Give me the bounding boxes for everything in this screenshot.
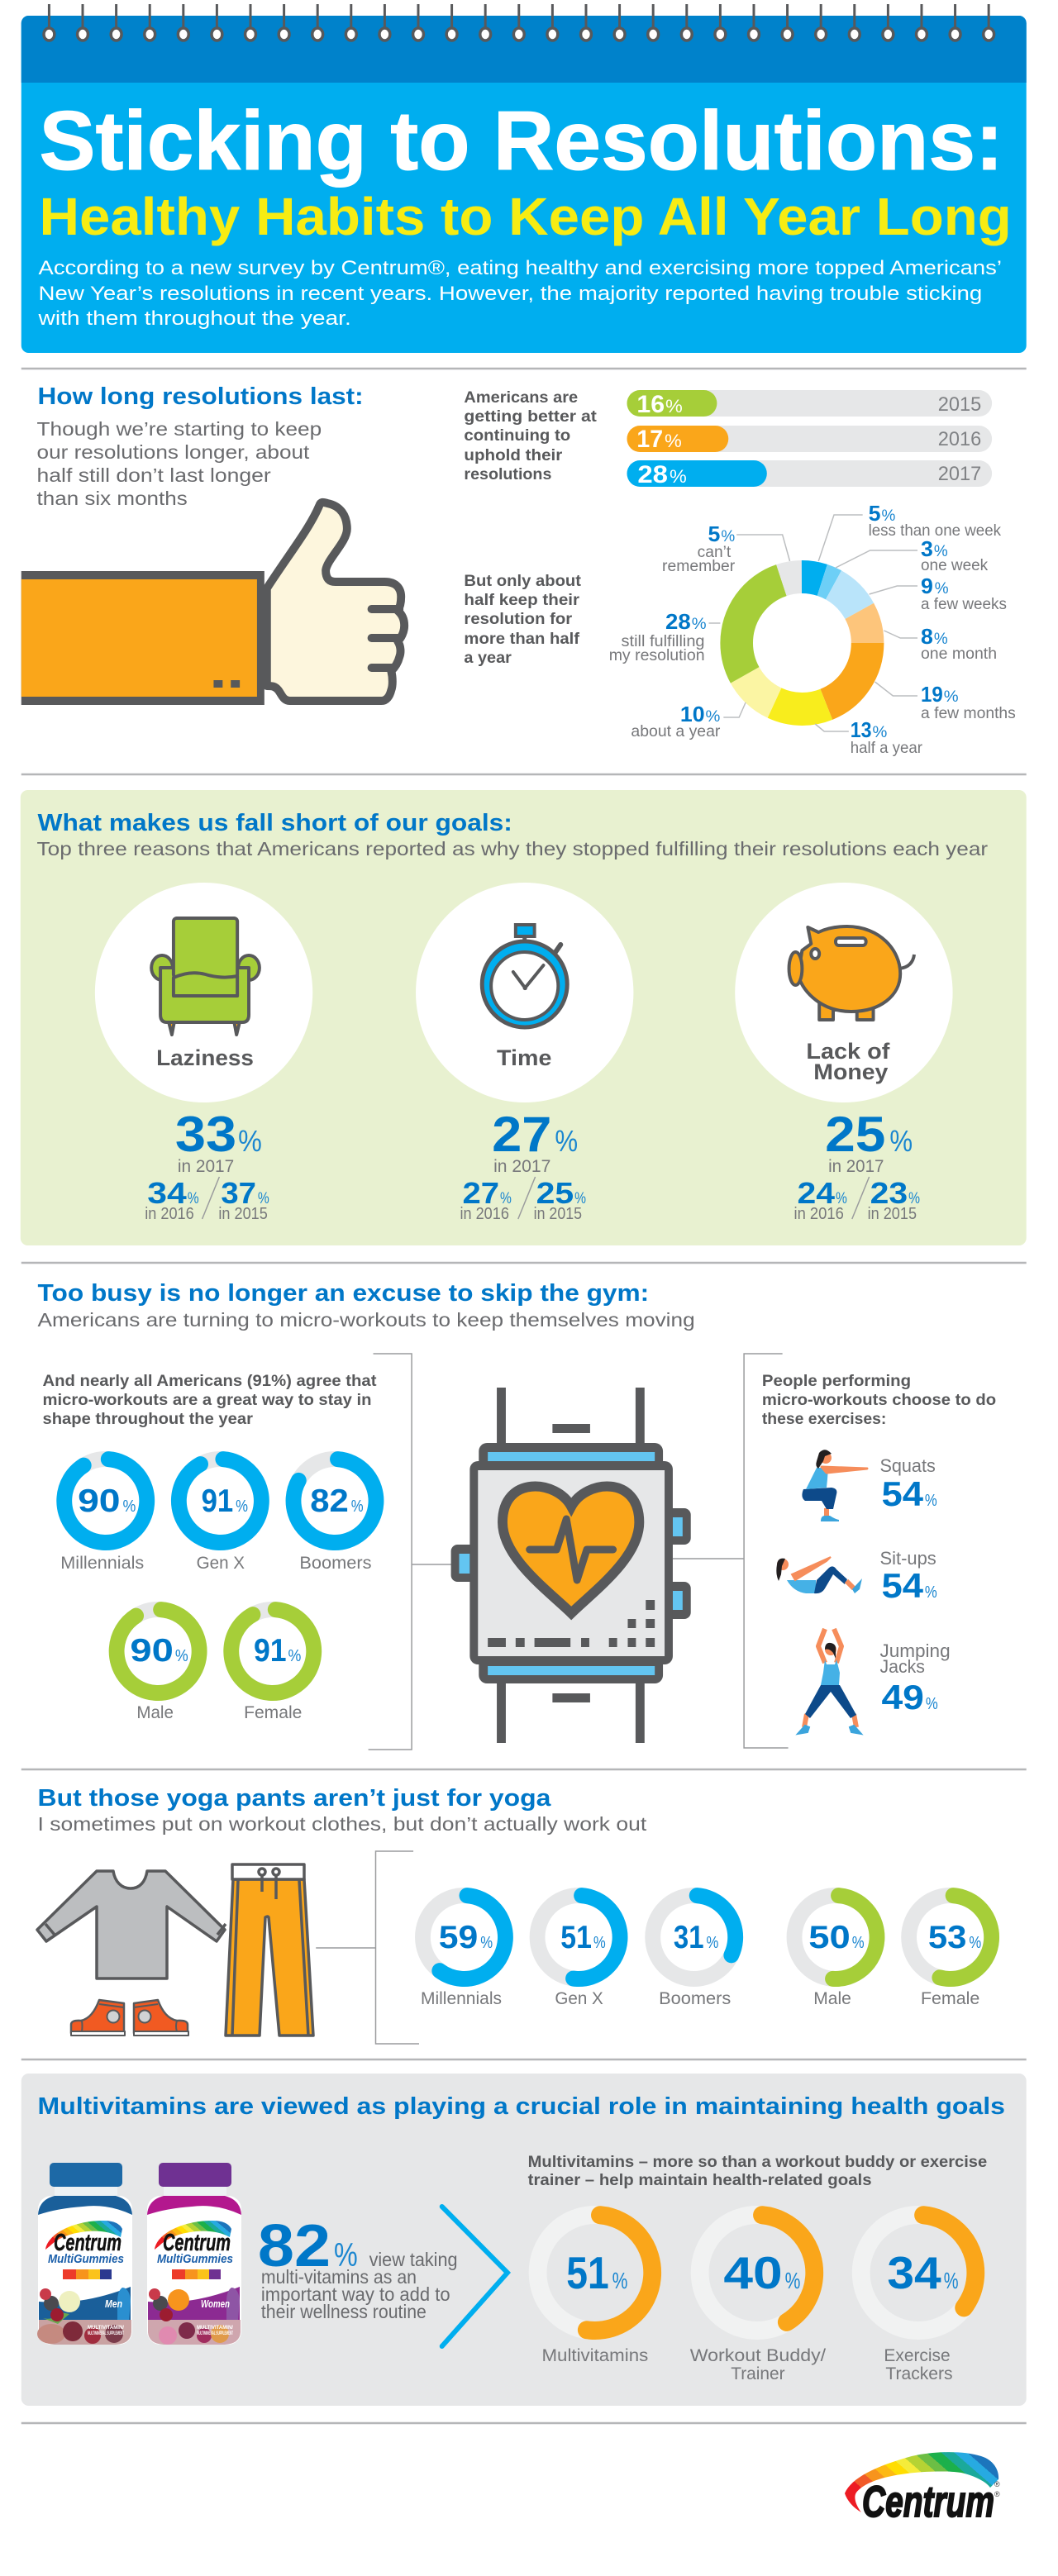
ring chart: boomers — [291, 1456, 379, 1573]
text: getting better: continuing to — [464, 427, 570, 445]
stat: 82%: view taking — [369, 2249, 458, 2270]
stat: prior years: in 2015 — [534, 1205, 582, 1223]
label: half a year: % — [873, 724, 888, 741]
text: micro-workouts: micro-workouts are a great way to stay in — [42, 1392, 372, 1409]
bar: 2017 — [627, 460, 992, 488]
label: can't remember: % — [721, 528, 735, 545]
stat: 25%: % — [889, 1125, 913, 1158]
stat: 25%: 25 — [825, 1107, 885, 1162]
label: sit-ups 54%: Sit-ups — [879, 1548, 936, 1569]
bar chart — [627, 390, 992, 488]
figure: sit-ups — [776, 1557, 862, 1593]
ring chart: boomers: 82 — [310, 1483, 349, 1519]
stat: 27%: in 2017 — [493, 1157, 550, 1176]
stat: 33%: in 2017 — [178, 1157, 234, 1176]
ring chart: gen x — [176, 1456, 264, 1573]
product: men's bottle: MULTIVITAMIN/ — [88, 2326, 124, 2331]
subheading: I sometimes put on workout clothes, but don’t actually work out — [38, 1813, 647, 1835]
ring chart: exercise trackers: % — [944, 2268, 959, 2293]
label: laziness: Laziness — [156, 1045, 254, 1070]
ring chart: male — [792, 1893, 879, 2008]
icon: stopwatch — [482, 925, 567, 1027]
label: can't remember — [662, 523, 735, 575]
product: women's bottle: MULTIVITAMIN/ — [197, 2326, 233, 2331]
label: still fulfilling: still fulfilling — [622, 633, 705, 650]
ring chart: male — [114, 1607, 202, 1722]
product: men's bottle: MultiGummies — [48, 2253, 124, 2266]
text: micro-workouts — [42, 1373, 377, 1428]
panel: how long resolutions last — [21, 383, 1016, 757]
donut chart — [609, 502, 1016, 757]
text: exercises — [762, 1373, 996, 1428]
intro text: with them throughout the year. — [37, 307, 351, 330]
text: exercises: People performing — [762, 1373, 911, 1390]
text: half keep: a year — [464, 650, 512, 667]
bar: 2016 — [627, 426, 992, 453]
label: one week: 3 — [921, 538, 933, 561]
text: half keep: resolution for — [464, 611, 573, 628]
label: lack of money — [806, 1039, 889, 1084]
ring chart: multivitamins: % — [612, 2268, 627, 2293]
ring chart: workout buddy: % — [785, 2268, 800, 2293]
ring chart: female: % — [969, 1934, 981, 1952]
ring chart: male: Male — [136, 1703, 174, 1722]
text: getting better — [464, 389, 598, 483]
bar: 2015: % — [665, 396, 683, 417]
label: jumping jacks 49%: % — [926, 1695, 938, 1713]
product: women's bottle: Women — [201, 2297, 230, 2310]
heading: But those yoga pants aren’t just for yoga — [38, 1785, 551, 1812]
stat: prior years: in 2016 — [460, 1205, 509, 1223]
label: less than one week: less than one week — [869, 522, 1002, 540]
stat: prior years: in 2016 — [145, 1205, 194, 1223]
stat: prior years: % — [908, 1190, 920, 1207]
stat: prior years: 37 — [221, 1177, 256, 1210]
text: getting better: resolutions — [464, 466, 551, 483]
ring chart: male: % — [852, 1934, 865, 1952]
text block: than six months — [37, 488, 188, 509]
label: a few months: % — [944, 688, 959, 706]
ring chart: female — [906, 1893, 994, 2008]
ring chart: millennials — [60, 1456, 150, 1573]
label: one week: % — [934, 543, 948, 560]
figure: jumping jacks — [798, 1629, 861, 1734]
ring chart: female: 53 — [928, 1920, 966, 1955]
text: micro-workouts: shape throughout the year — [42, 1411, 254, 1428]
product: women's bottle: MULTIMINERAL SUPPLEMENT — [197, 2331, 233, 2336]
panel: what makes us fall short — [21, 790, 1027, 1245]
label: one month: 8 — [921, 626, 933, 649]
intro text: According to a new survey by Centrum®, eating healthy and exercising more topped Americans’ — [39, 257, 1002, 279]
bar: 2015: 16 — [636, 391, 665, 418]
ring chart: millennials: % — [123, 1498, 136, 1516]
ring chart: millennials: Millennials — [421, 1989, 502, 2008]
ring chart: millennials: % — [480, 1934, 493, 1952]
ring chart: workout buddy — [690, 2210, 826, 2383]
stat: prior years: 24 — [797, 1177, 835, 1210]
icon: notebook spiral binding — [44, 4, 994, 40]
label: still fulfilling — [609, 611, 707, 664]
label: less than one week — [869, 502, 1002, 540]
stat: prior years: % — [500, 1190, 512, 1207]
ring chart: gen x: 91 — [202, 1483, 233, 1519]
stat: prior years: in 2016 — [794, 1205, 844, 1223]
ring chart: male: % — [175, 1647, 188, 1665]
stat: prior years — [794, 1177, 920, 1223]
label: still fulfilling: 28 — [665, 611, 691, 634]
product: women's bottle: MultiGummies — [157, 2253, 233, 2266]
arrow: chevron — [442, 2207, 508, 2346]
text: half keep: more than half — [464, 631, 580, 648]
label: lack of money: Lack of — [806, 1039, 889, 1064]
stat: 27%: 27 — [492, 1107, 551, 1162]
label: can't remember: can’t — [698, 544, 732, 561]
stat: prior years: % — [836, 1190, 847, 1207]
label: sit-ups 54%: % — [925, 1583, 937, 1602]
stat: prior years: 25 — [536, 1177, 574, 1210]
ring chart: male: 50 — [808, 1920, 851, 1955]
label: less than one week: % — [881, 507, 895, 525]
logo: centrum — [845, 2452, 1000, 2526]
icon: piggy bank — [789, 926, 914, 1020]
bar: 2015 — [627, 390, 992, 418]
text: more so than a workout buddy — [528, 2154, 987, 2189]
bar: 2015: 2015 — [938, 393, 981, 416]
label: one week: one week — [921, 557, 989, 574]
label: one month: one month — [921, 645, 997, 663]
label: one month — [921, 626, 997, 663]
ring chart: workout buddy: 40 — [723, 2247, 783, 2298]
label: sit-ups 54% — [879, 1548, 937, 1605]
text: micro-workouts: And nearly all Americans (91%) agree that — [42, 1373, 377, 1390]
bar: 2016: 2016 — [938, 428, 981, 450]
ring chart: male: Male — [813, 1989, 851, 2008]
ring chart: female: % — [288, 1647, 301, 1665]
text block: our resolutions longer, about — [37, 441, 310, 463]
text: getting better: getting better at — [464, 408, 598, 426]
label: a few weeks: a few weeks — [921, 596, 1007, 613]
heading: How long resolutions last: — [38, 383, 364, 410]
ring chart: gen x: Gen X — [555, 1989, 603, 2008]
ring chart: exercise trackers: Trackers — [885, 2364, 953, 2383]
logo: centrum: ® — [994, 2490, 1000, 2498]
text block: half still don’t last longer — [37, 464, 271, 486]
text block — [37, 418, 322, 509]
label: jumping jacks 49%: 49 — [881, 1678, 924, 1717]
stat: 82%: important way to add to — [261, 2283, 450, 2305]
stat: prior years: 27 — [462, 1177, 499, 1210]
text: exercises: micro-workouts choose to do — [762, 1392, 996, 1409]
label: about a year: about a year — [631, 723, 720, 740]
icon: thumbs up with sleeve — [21, 502, 404, 705]
ring chart: millennials: 90 — [78, 1483, 121, 1519]
stat: prior years: 34 — [147, 1177, 187, 1210]
ring chart: female: Female — [244, 1703, 302, 1722]
bar: 2017: % — [670, 466, 687, 487]
heading: Too busy is no longer an excuse to skip the gym: — [38, 1280, 649, 1307]
stat: prior years: % — [258, 1190, 269, 1207]
label: can't remember: 5 — [708, 523, 720, 546]
label: about a year: % — [706, 708, 721, 726]
label: squats 54% — [879, 1455, 937, 1513]
stat: prior years: % — [574, 1190, 586, 1207]
label: a few weeks: % — [935, 580, 949, 598]
product: men's bottle: Centrum — [54, 2230, 122, 2256]
intro text: New Year’s resolutions in recent years. However, the majority reported having trouble sticking — [39, 283, 982, 305]
intro text — [37, 257, 1002, 330]
label: about a year — [631, 703, 721, 740]
panel: multivitamins — [21, 2074, 1027, 2406]
label: half a year: 13 — [851, 719, 872, 742]
ring chart: millennials — [420, 1893, 508, 2008]
label: jumping jacks 49% — [879, 1640, 951, 1717]
icon: sneakers — [71, 2000, 188, 2036]
bar: 2016: 17 — [636, 426, 663, 453]
ring chart: boomers: % — [351, 1498, 364, 1516]
stat: prior years: in 2015 — [868, 1205, 917, 1223]
subheading: Americans are turning to micro-workouts to keep themselves moving — [38, 1309, 695, 1331]
stat: 25%: in 2017 — [828, 1157, 884, 1176]
text: getting better: Americans are — [464, 389, 578, 407]
label: a few months — [921, 683, 1016, 722]
label: a few months: a few months — [921, 705, 1016, 722]
label: squats 54%: Squats — [879, 1455, 936, 1476]
ring chart: workout buddy: Trainer — [731, 2364, 785, 2383]
label: about a year: 10 — [680, 703, 705, 726]
label: a few weeks — [921, 575, 1007, 613]
icon: armchair — [151, 918, 260, 1035]
text: more so than a workout buddy: Multivitamins – more so than a workout buddy or exercise — [528, 2154, 987, 2171]
label: one week — [921, 538, 989, 574]
ring chart: female: 91 — [254, 1633, 287, 1669]
product: men's bottle — [37, 2163, 132, 2345]
label: can't remember: remember — [662, 558, 735, 575]
product: men's bottle: Men — [105, 2297, 122, 2310]
label: half a year — [851, 719, 922, 757]
column: lack of money — [735, 883, 953, 1223]
stat: prior years — [145, 1177, 269, 1223]
ring chart: boomers: Boomers — [299, 1554, 372, 1573]
ring chart: female: Female — [921, 1989, 979, 2008]
text block: Though we’re starting to keep — [37, 418, 322, 440]
ring chart: boomers: 31 — [674, 1920, 704, 1955]
ring chart: exercise trackers: 34 — [887, 2247, 941, 2298]
ring chart: multivitamins — [533, 2210, 657, 2365]
text: half keep: But only about — [464, 573, 582, 590]
bar: 2017: 28 — [637, 461, 668, 488]
subheading: Top three reasons that Americans reported as why they stopped fulfilling their resolutions each year — [37, 838, 989, 859]
text: exercises: these exercises: — [762, 1411, 886, 1428]
label: less than one week: 5 — [869, 502, 880, 526]
label: jumping jacks 49%: Jumping — [879, 1640, 951, 1661]
text: half keep — [464, 573, 582, 667]
stat: 82%: 82 — [258, 2213, 331, 2279]
ring chart: gen x — [535, 1893, 622, 2008]
label: still fulfilling: % — [692, 616, 707, 633]
text: half keep: half keep their — [464, 592, 580, 609]
ring chart: multivitamins: 51 — [566, 2247, 609, 2298]
stat: 82% — [258, 2213, 458, 2322]
ring chart: gen x: % — [236, 1498, 248, 1516]
header panel — [21, 4, 1027, 353]
stat: 82%: multi-vitamins as an — [261, 2266, 417, 2288]
ring chart: workout buddy: Workout Buddy/ — [690, 2346, 826, 2365]
ring chart: multivitamins: Multivitamins — [542, 2346, 648, 2365]
panel: too busy — [38, 1280, 996, 1750]
label: lack of money: Money — [813, 1059, 888, 1084]
stat: 25% — [825, 1107, 913, 1176]
ring chart: boomers — [650, 1893, 738, 2008]
figure: squats — [802, 1450, 867, 1521]
subtitle: Healthy Habits to Keep All Year Long — [40, 188, 1012, 246]
text: getting better: uphold their — [464, 447, 563, 464]
label: half a year: half a year — [851, 740, 922, 757]
logo: centrum: Centrum — [862, 2478, 994, 2526]
heading: What makes us fall short of our goals: — [38, 810, 512, 836]
ring chart: male: 90 — [130, 1633, 174, 1669]
stat: prior years — [460, 1177, 586, 1223]
stat: 27%: % — [555, 1125, 578, 1158]
product: women's bottle: Centrum — [163, 2230, 231, 2256]
label: a few weeks: 9 — [921, 575, 933, 598]
stat: prior years: 23 — [870, 1177, 908, 1210]
label: squats 54%: 54 — [881, 1474, 924, 1513]
stat: prior years: in 2015 — [218, 1205, 268, 1223]
label: still fulfilling: my resolution — [609, 647, 705, 664]
title: Sticking to Resolutions: — [40, 95, 1003, 188]
ring chart: gen x: 51 — [560, 1920, 592, 1955]
icon: yoga pants — [226, 1864, 313, 2036]
bar: 2016: % — [665, 431, 682, 451]
product: men's bottle: MULTIMINERAL SUPPLEMENT — [88, 2331, 124, 2336]
column: laziness — [95, 883, 312, 1223]
ring chart: exercise trackers — [856, 2210, 980, 2383]
label: sit-ups 54%: 54 — [881, 1566, 924, 1605]
label: squats 54%: % — [925, 1492, 937, 1510]
stat: 82%: % — [334, 2237, 358, 2274]
ring chart: gen x: % — [593, 1934, 606, 1952]
label: jumping jacks 49%: Jacks — [879, 1656, 925, 1677]
ring chart: exercise trackers: Exercise — [884, 2346, 951, 2365]
column: time — [416, 883, 633, 1223]
panel: yoga pants — [37, 1785, 994, 2044]
logo: centrum: ® — [994, 2480, 1000, 2488]
stat: prior years: % — [188, 1190, 199, 1207]
ring chart: millennials: 59 — [439, 1920, 478, 1955]
stat: 27% — [492, 1107, 578, 1176]
ring chart: boomers: % — [707, 1934, 718, 1952]
icon: sweatshirt — [37, 1871, 226, 1978]
ring chart: female — [228, 1607, 317, 1722]
stat: 33%: 33 — [175, 1107, 236, 1162]
stat: 82%: their wellness routine — [261, 2301, 427, 2322]
stat: 33%: % — [238, 1125, 262, 1158]
heading: Multivitamins are viewed as playing a crucial role in maintaining health goals — [38, 2093, 1005, 2120]
ring chart: gen x: Gen X — [197, 1554, 245, 1573]
icon: smartwatch with heart — [451, 1388, 691, 1743]
ring chart: boomers: Boomers — [659, 1989, 731, 2008]
text: more so than a workout buddy: trainer – help maintain health-related goals — [528, 2172, 872, 2189]
label: a few months: 19 — [921, 683, 943, 707]
stat: 33% — [175, 1107, 262, 1176]
label: time: Time — [497, 1045, 551, 1070]
ring chart: millennials: Millennials — [60, 1554, 144, 1573]
label: one month: % — [934, 631, 948, 648]
bar: 2017: 2017 — [938, 463, 981, 485]
product: women's bottle — [147, 2163, 241, 2345]
